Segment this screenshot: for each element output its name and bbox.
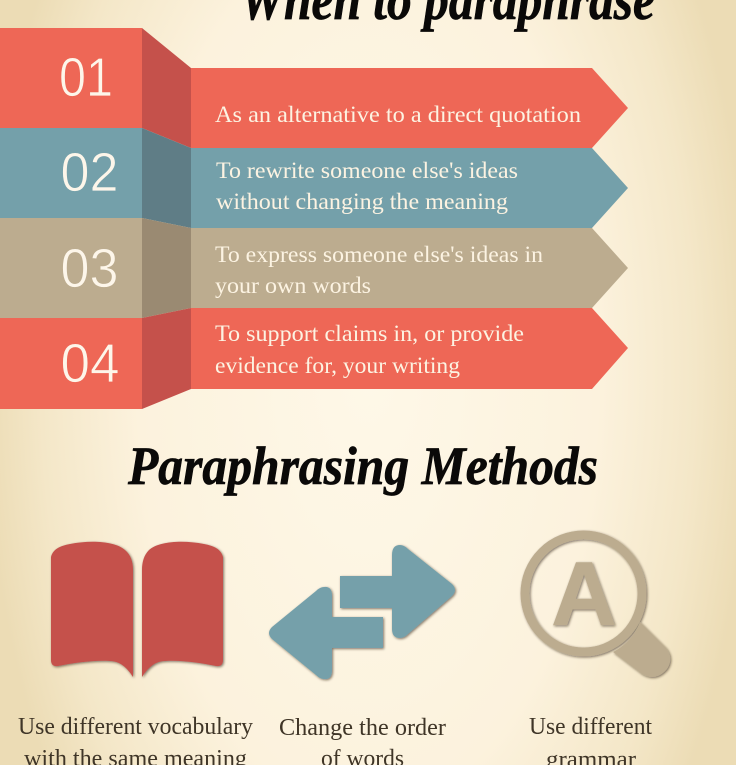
item 02: without changing the meaning [216,189,509,214]
item 03 [0,218,628,318]
icon: magnifying glass with letter A: A [552,545,616,645]
icon: open book [51,542,223,677]
item 01: 01 [59,46,113,108]
caption: vocabulary [18,714,253,765]
heading: paraphrasing methods: Paraphrasing Methods [127,436,598,496]
item 01: As an alternative to a direct quotation [215,102,582,127]
item 03: To express someone else's ideas in [215,242,544,267]
item 04: 04 [60,332,120,394]
caption: grammar [529,714,652,765]
caption: grammar: Use different [529,714,652,740]
caption: vocabulary: Use different vocabulary [18,714,253,740]
item 02: 02 [60,141,118,203]
caption: word order: Change the order [279,715,446,741]
item 03: your own words [215,273,371,298]
icon: magnifying glass with letter A [525,535,670,677]
ribbon list [0,28,628,409]
caption: word order [279,715,446,765]
item 04: To support claims in, or provide [215,321,524,346]
item 02: To rewrite someone else's ideas [216,158,518,183]
item 02 [0,128,628,228]
icon: swap arrows [269,545,455,679]
item 03: 03 [60,237,118,299]
item 04 [0,308,628,409]
item 04: evidence for, your writing [215,353,460,378]
item 01 [0,28,628,148]
